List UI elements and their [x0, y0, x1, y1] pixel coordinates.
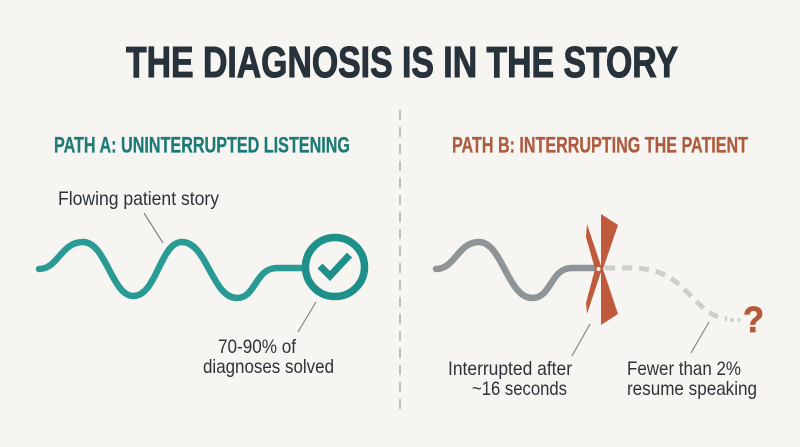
label: diagnoses solved: diagnoses solved [203, 356, 334, 378]
icon: scissors [586, 214, 618, 325]
heading: path A: PATH A: UNINTERRUPTED LISTENING [54, 132, 350, 158]
panel: path A uninterrupted listening [39, 132, 364, 378]
panel: path B interrupting the patient [436, 132, 764, 400]
chart: flowing teal wave [39, 242, 304, 298]
icon: check circle [306, 238, 364, 296]
label: flowing patient story: Flowing patient story [58, 188, 219, 210]
label: interrupted after 16 seconds: Interrupted after [448, 358, 572, 380]
chart: interrupted grey wave [436, 242, 594, 298]
chart: dashed fading path [605, 268, 727, 319]
label: fewer than 2% resume speaking: resume speaking [627, 378, 757, 400]
label: diagnoses solved: 70-90% of [218, 336, 296, 358]
icon: question mark: ? [743, 299, 764, 340]
label: fewer than 2% resume speaking: Fewer than 2% [627, 358, 741, 380]
label: interrupted after 16 seconds: ~16 seconds [472, 378, 567, 400]
